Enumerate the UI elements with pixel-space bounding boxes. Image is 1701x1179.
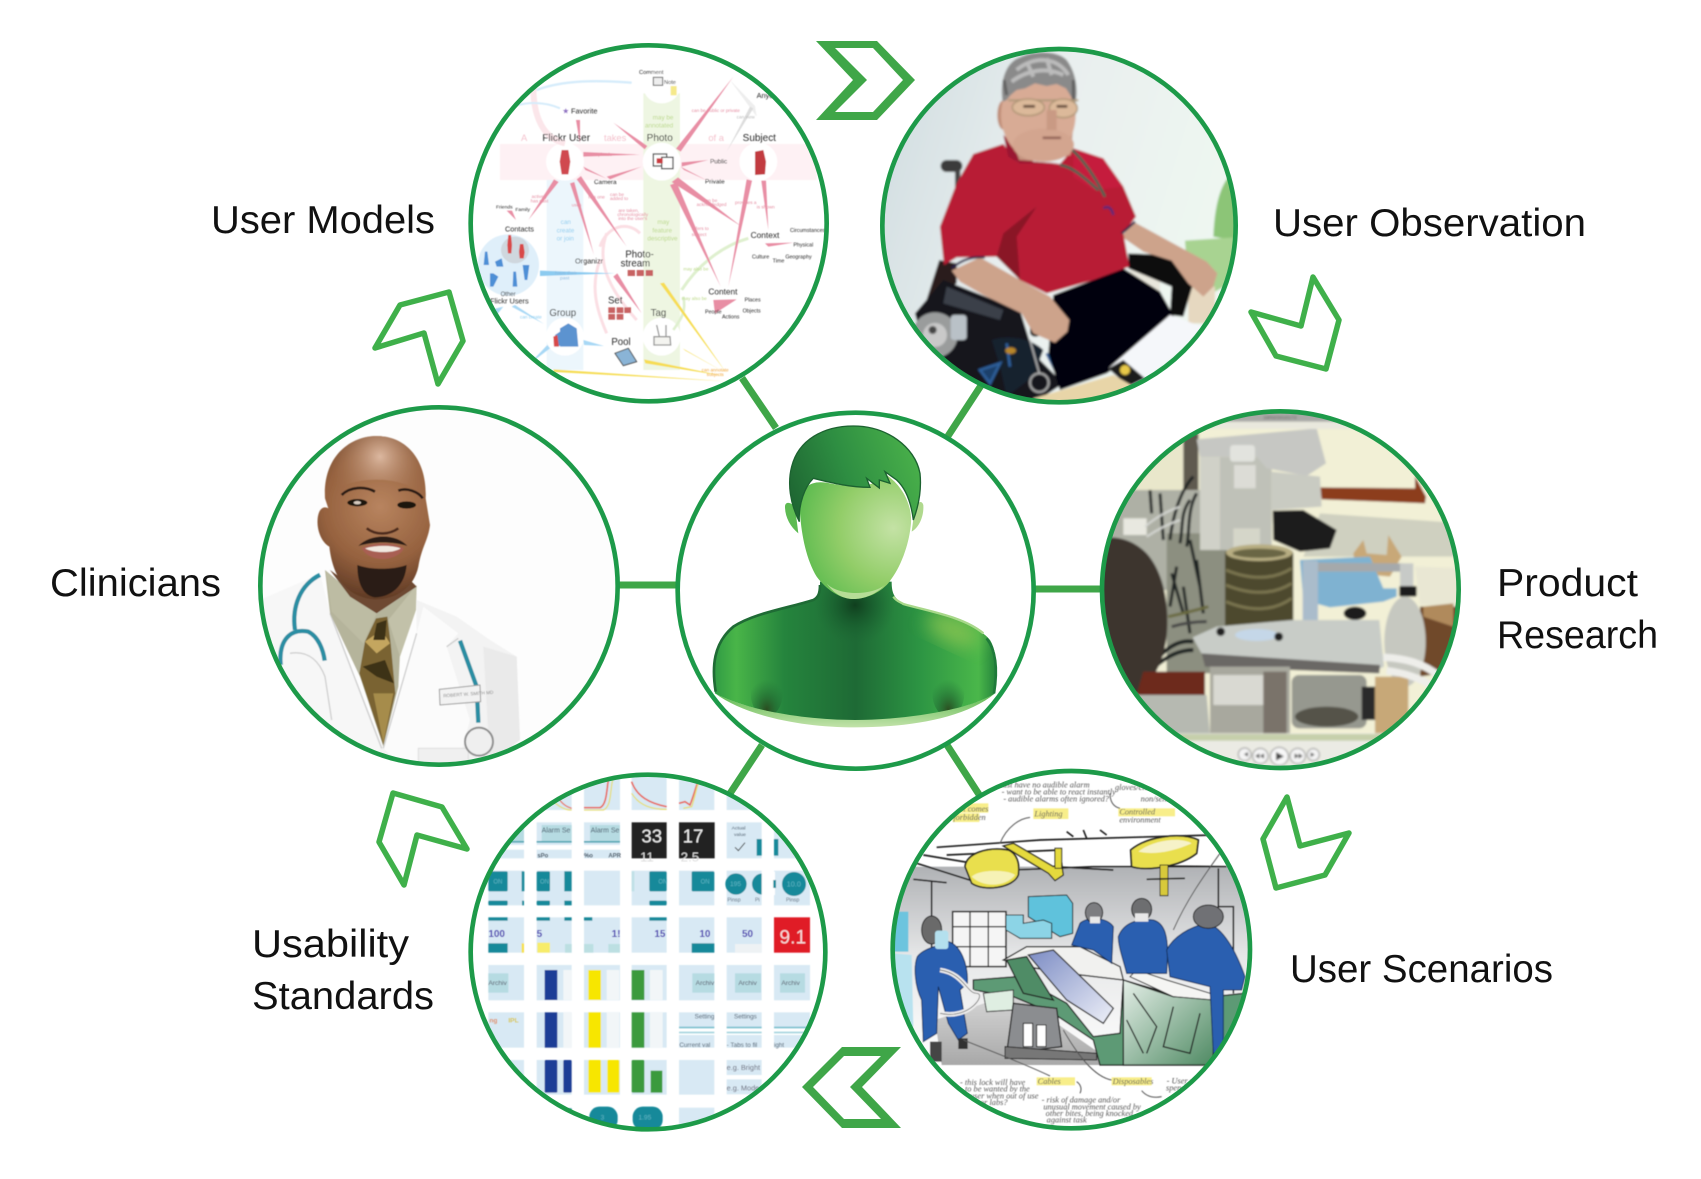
panel: user observation photo: [877, 43, 1243, 410]
floor: [935, 993, 1100, 1065]
map labels: Circumstances: [790, 228, 826, 234]
map labels: can be: [610, 192, 624, 197]
connector lines between centre and outer circles: [618, 378, 1102, 798]
red polo shirt: [940, 135, 1136, 293]
handwritten annotations: unusual movement caused by: [1043, 1102, 1141, 1111]
map labels: Organizr: [575, 256, 604, 265]
arrow: user scenarios to usability standards: [802, 1047, 901, 1128]
row 8: teal pills: 1.95: [638, 1114, 652, 1121]
map labels: has past: [531, 199, 549, 204]
row 1: waveform cells: [537, 777, 762, 810]
map labels: descriptive: [647, 236, 678, 243]
map yellow and blue links: [490, 80, 757, 381]
row 2: alarm settings and readouts: 11: [640, 850, 654, 865]
row 3: on buttons and dials: ON: [540, 879, 549, 885]
row 5: archive buttons and colour gauges: Archiv: [738, 980, 757, 987]
video title bar: [1214, 414, 1346, 428]
map labels: A: [521, 133, 528, 143]
map labels: Tag: [651, 308, 666, 319]
map labels: Other: [501, 292, 516, 298]
row 3: on buttons and dials: Pinsp: [786, 897, 799, 903]
map labels: Family: [515, 207, 531, 213]
map labels: feature: [652, 227, 673, 234]
row 6: colour gauges and settings: - Tabs to fil: [727, 1042, 757, 1049]
map labels: [490, 70, 826, 377]
map labels: Public: [710, 158, 727, 165]
map labels: stream: [621, 259, 650, 270]
label: usability standards: Usability: [252, 923, 410, 966]
map colour bands: [490, 70, 817, 370]
handwritten annotations: must have no audible alarm: [997, 780, 1090, 789]
bellows: [1225, 544, 1293, 630]
row 5: archive buttons and colour gauges: Archiv: [781, 980, 800, 987]
stethoscope chest piece: [465, 728, 493, 756]
surgeons in blue: [915, 919, 1245, 1053]
row 2: alarm settings and readouts: value: [734, 832, 746, 838]
map labels: Time: [773, 259, 784, 265]
row 3: on buttons and dials: ON: [658, 879, 667, 885]
row 2: alarm settings and readouts: sPo: [537, 854, 549, 860]
map labels: has one: [588, 195, 605, 200]
map labels: acknowledged: [697, 202, 727, 207]
row 6: colour gauges and settings: IPL: [508, 1018, 519, 1025]
chrome post and rod: [1292, 561, 1426, 687]
handwritten annotations: environment: [1119, 815, 1161, 824]
handwritten annotations: Lighting: [1033, 810, 1063, 819]
handwritten annotations: spend: [1166, 1084, 1186, 1093]
handwritten annotations: - risk of damage and/or: [1042, 1095, 1121, 1104]
map labels: actively: [532, 194, 548, 199]
handwritten annotations: to be wanted by the: [965, 1085, 1030, 1094]
map labels: takes: [604, 133, 627, 143]
handwritten annotations: Controlled: [1119, 807, 1156, 816]
row 6: colour gauges and settings: Current val: [679, 1042, 710, 1049]
row 2: alarm settings and readouts: Actual: [732, 825, 746, 831]
row 3: on buttons and dials: ON: [701, 879, 710, 885]
map labels: uploads: [596, 152, 613, 157]
name badge: [439, 685, 494, 705]
row 4: numeric values and alarm value: 50: [742, 929, 754, 940]
blue tray: [1300, 557, 1397, 607]
shirt and collar: [325, 570, 417, 747]
torso: [714, 567, 996, 720]
video title bar: 19/02/2010172: [1263, 415, 1297, 421]
panel: user models concept map: [460, 37, 837, 410]
face: [800, 475, 911, 599]
map labels: provides a: [735, 200, 757, 205]
panel: usability standards interface grid: [467, 770, 830, 1133]
map labels: create: [557, 227, 575, 234]
map labels: Favorite: [571, 107, 597, 116]
row 4: numeric values and alarm value: 15: [654, 929, 666, 940]
row 6: colour gauges and settings: ight: [774, 1042, 784, 1049]
cables: [940, 970, 980, 1014]
row 4: numeric values and alarm value: 1!: [612, 929, 621, 940]
row 6: colour gauges and settings: Setting: [695, 1013, 715, 1020]
panel: user scenarios sketch: [887, 767, 1257, 1133]
map labels: chronologically: [617, 212, 649, 217]
map labels: may be: [653, 114, 674, 121]
handwritten annotations: forbidden: [953, 813, 986, 822]
row 4: numeric values and alarm value: 10: [699, 929, 711, 940]
paper and table: [1032, 312, 1200, 400]
map labels: can annotate: [702, 368, 729, 373]
map labels: Contacts: [505, 224, 534, 233]
map labels: Actions: [722, 314, 740, 320]
map labels: can be public or private: [692, 108, 740, 113]
map labels: may also be: [682, 296, 707, 301]
green drapes and patient: [973, 947, 1243, 1065]
label: product research: Product: [1497, 562, 1638, 605]
row 4: numeric values and alarm value: 9.1: [779, 927, 806, 948]
map labels: Note: [664, 80, 676, 86]
panel: product research photo: [1097, 407, 1467, 773]
operator head: [1097, 538, 1167, 693]
map labels: Anyone: [757, 91, 782, 100]
handwritten annotations: non/sensor: [1141, 795, 1178, 804]
handwritten annotations: other bites, being knocked: [1046, 1109, 1134, 1118]
map labels: Set: [608, 295, 623, 306]
machine column and arm: [1197, 428, 1337, 552]
map labels: have their: [555, 271, 577, 277]
map labels: can: [561, 219, 571, 226]
row 3: on buttons and dials: 195: [730, 881, 741, 888]
row 5: archive buttons and colour gauges: Archiv: [696, 980, 715, 987]
row 3: on buttons and dials: Pinsp: [727, 897, 741, 903]
bottom light sliver: [715, 693, 995, 727]
row 2: alarm settings and readouts: [488, 822, 810, 865]
map labels: refers to: [692, 226, 709, 231]
map labels: can create: [520, 314, 542, 319]
map labels: subjects: [707, 372, 724, 377]
head: [317, 436, 430, 599]
map labels: Comment: [639, 70, 664, 76]
lower column: [1210, 667, 1408, 735]
map labels: Content: [708, 287, 738, 297]
row 4: numeric values and alarm value: [488, 917, 810, 953]
row 2: alarm settings and readouts: 33: [641, 826, 662, 847]
handwritten annotations: - audible alarms often ignored?: [1003, 794, 1110, 803]
map labels: Private: [705, 178, 725, 185]
wires: [1145, 477, 1208, 667]
map labels: Photo: [647, 133, 673, 144]
row 3: on buttons and dials: 10.0: [787, 879, 801, 888]
black trousers and chair arm: [1048, 253, 1193, 390]
map contacts globe: [478, 77, 766, 366]
map labels: Culture: [752, 255, 769, 261]
row 5: archive buttons and colour gauges: Archiv: [488, 980, 507, 987]
handwritten annotations: hot comes: [955, 805, 989, 814]
map labels: into the user's: [618, 216, 648, 221]
arrow: user observation to product research: [1251, 277, 1339, 369]
arrow: user models to user observation: [816, 41, 915, 120]
row 2: alarm settings and readouts: APR: [608, 854, 622, 860]
green chair: [1130, 178, 1234, 324]
map labels: are taken,: [618, 208, 639, 213]
breathing tubes: [1383, 657, 1440, 687]
map labels: Subject: [743, 133, 776, 144]
necktie: [359, 617, 395, 745]
row 2: alarm settings and readouts: Alarm Se: [591, 827, 620, 834]
panel: central user figure: [677, 412, 1034, 769]
label: clinicians: Clinicians: [50, 562, 221, 605]
map labels: or join: [557, 236, 574, 243]
map labels: can be: [703, 198, 718, 203]
handwritten annotations: - User will: [1167, 1076, 1203, 1085]
map link wedges: [507, 77, 793, 313]
map labels: Camera: [594, 179, 617, 186]
handwritten annotations: - want to be able to react instantly: [1002, 787, 1116, 796]
map labels: Geography: [785, 255, 812, 261]
handwritten annotations: Cables: [1038, 1077, 1061, 1086]
label: product research: Research: [1497, 614, 1658, 657]
video player bar: [1178, 732, 1382, 766]
operating theatre wall: [893, 867, 1250, 1065]
map labels: Group: [549, 308, 576, 319]
wheelchair: [912, 160, 1063, 403]
row 6: colour gauges and settings: Settings: [734, 1013, 757, 1020]
map labels: Friends: [496, 205, 513, 211]
surgical lights: [965, 817, 1220, 930]
arrow: usability standards to clinicians: [379, 793, 467, 885]
row 8: teal pills: 3: [601, 1114, 605, 1121]
label: user models: User Models: [211, 199, 435, 242]
row 2: alarm settings and readouts: 17: [683, 826, 703, 847]
ceiling lines: [913, 830, 1233, 993]
arrow: product research to user scenarios: [1263, 797, 1349, 888]
row 3: on buttons and dials: Pi: [755, 897, 760, 903]
map labels: of a: [708, 133, 725, 143]
row 6: colour gauges and settings: ng: [489, 1018, 497, 1025]
white coat: [260, 574, 520, 770]
row 3: on buttons and dials: ON: [493, 879, 502, 885]
map labels: can view: [737, 115, 755, 120]
map labels: Flickr Users: [490, 296, 529, 305]
map labels: Context: [751, 230, 780, 240]
table base: [1005, 1003, 1097, 1060]
map labels: Pool: [611, 337, 631, 348]
base plate: [1193, 620, 1384, 673]
map labels: Physical: [793, 243, 813, 249]
row 3: on buttons and dials: [488, 871, 810, 905]
surgeon heads: [922, 898, 1223, 1062]
stethoscope: [280, 575, 478, 723]
map labels: Objects: [743, 309, 761, 315]
handwritten annotations: user when out of use: [970, 1091, 1039, 1100]
row 5: archive buttons and colour gauges: [488, 965, 810, 1000]
handwritten annotations: Disposables: [1112, 1077, 1153, 1086]
row 6: colour gauges and settings: [488, 1012, 810, 1049]
map labels: uses: [572, 203, 582, 208]
handwritten annotations: against task: [1047, 1116, 1087, 1125]
map labels: Flickr User: [542, 133, 591, 144]
row 7: colour gauges and hints: e.g. Bright: [727, 1063, 760, 1072]
window and machine: [893, 895, 1073, 1027]
row 7: colour gauges and hints: [488, 1060, 762, 1095]
map labels: Places: [745, 297, 761, 303]
row 4: numeric values and alarm value: 5: [537, 929, 543, 940]
map labels: may: [657, 219, 670, 226]
room background: [1112, 434, 1456, 678]
map labels: People: [705, 309, 722, 315]
map labels: is shown: [757, 205, 775, 210]
name badge: ROBERT W. SMITH MD: [443, 690, 494, 698]
row 4: numeric values and alarm value: 100: [488, 929, 505, 940]
handwritten annotations: gloves/clean: [1115, 783, 1157, 792]
map labels: added to: [610, 196, 629, 201]
handwritten annotations: or labs?: [980, 1098, 1008, 1107]
handwritten annotations: [953, 780, 1203, 1125]
arrow: clinicians to user models: [375, 292, 463, 384]
row 2: alarm settings and readouts: %o: [584, 854, 593, 860]
row 7: colour gauges and hints: e.g. Mode: [727, 1084, 759, 1093]
row 8: teal pills: [537, 1107, 714, 1131]
map labels: may also be: [683, 267, 709, 272]
row 2: alarm settings and readouts: 2.5: [681, 850, 699, 865]
hair: [790, 426, 920, 522]
row 2: alarm settings and readouts: Alarm Se: [542, 827, 571, 834]
label: user observation: User Observation: [1273, 202, 1586, 245]
map labels: past: [560, 275, 570, 281]
panel: clinicians doctor portrait: [257, 403, 623, 770]
head: [997, 52, 1078, 162]
map labels: subject: [692, 232, 707, 237]
map labels: ★: [562, 107, 569, 116]
handwritten annotations: - this lock will have: [960, 1078, 1026, 1087]
map labels: Photo-: [625, 249, 654, 260]
label: user scenarios: User Scenarios: [1290, 948, 1553, 991]
arms: [952, 222, 1217, 343]
label: usability standards: Standards: [252, 975, 434, 1018]
map labels: annotated: [645, 122, 674, 129]
ears: [785, 502, 923, 533]
